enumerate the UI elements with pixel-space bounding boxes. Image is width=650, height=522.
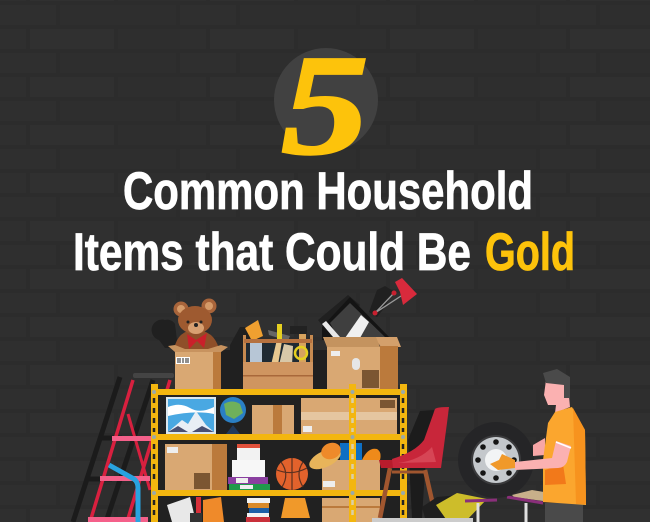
man rolling tyre (490, 369, 586, 522)
calendar, boxes and binders (228, 444, 270, 490)
tyre (458, 422, 534, 498)
large box (165, 444, 227, 490)
cloth and trolley (372, 490, 544, 522)
hand truck (109, 465, 138, 522)
title: Gold (485, 223, 575, 282)
stepladder (73, 373, 174, 522)
wide box (301, 398, 397, 434)
title (73, 162, 575, 282)
small box (252, 405, 294, 434)
box with mouse (323, 337, 401, 389)
box with bear (168, 345, 228, 389)
basketball (276, 458, 308, 490)
picture frame (166, 397, 216, 434)
stack of books (246, 498, 270, 522)
number badge: 5 (281, 26, 369, 184)
lower right box (322, 498, 380, 522)
far arm (533, 438, 545, 456)
computer mouse (352, 358, 360, 370)
hair (543, 369, 570, 398)
face and neck (544, 380, 570, 413)
glove (490, 454, 515, 470)
shelf back (157, 395, 401, 522)
box with hat and shirt (306, 440, 381, 490)
title: Items that Could Be (73, 223, 471, 282)
table lamp (281, 498, 310, 518)
shadows behind storage (152, 286, 393, 389)
yellow shelving (151, 384, 407, 522)
desk lamp (372, 278, 417, 316)
near arm (515, 441, 571, 470)
toolbox (243, 320, 313, 389)
teddy bear (174, 298, 219, 349)
chair (379, 407, 449, 518)
title: Common Household (123, 162, 533, 221)
shirt (543, 407, 586, 505)
sleeve stripe (556, 442, 571, 448)
globe (220, 397, 246, 434)
papers and stationery (167, 497, 224, 522)
trousers (545, 503, 583, 522)
monitor and keyboard (322, 297, 392, 340)
